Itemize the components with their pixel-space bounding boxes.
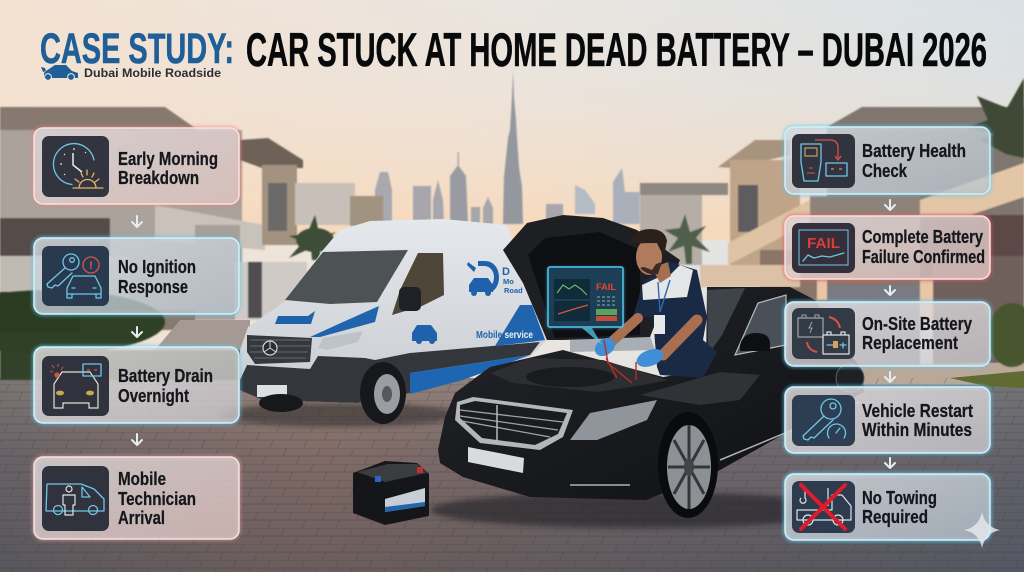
van hood stripe <box>310 306 379 337</box>
icon: battery swap <box>792 308 855 359</box>
van grille <box>247 335 312 364</box>
van front wheel <box>360 362 406 424</box>
panel: vehicle restart within minutes <box>785 387 990 453</box>
left villas <box>0 107 383 330</box>
label: Arrival <box>118 508 165 528</box>
brand logo: Dubai Mobile Roadside <box>41 65 221 80</box>
arrow <box>132 434 142 445</box>
technician hair <box>630 229 667 256</box>
van headlight <box>318 331 363 350</box>
label: Vehicle Restart <box>862 401 973 421</box>
car plate <box>468 447 524 473</box>
icon: van and technician <box>42 466 109 531</box>
arrow <box>885 200 895 210</box>
panel: mobile technician arrival <box>34 457 239 539</box>
technician right arm <box>663 320 697 355</box>
arrow <box>132 216 142 227</box>
car body <box>438 287 864 500</box>
van rear wheel <box>259 394 303 412</box>
van logo text <box>502 266 523 295</box>
label: Response <box>118 277 188 297</box>
van door window <box>392 253 444 315</box>
lanyard and badge <box>654 280 670 334</box>
technician shirt yoke <box>642 265 693 300</box>
car headlight <box>570 400 657 440</box>
label: Technician <box>118 489 196 509</box>
rear wheel <box>836 364 864 392</box>
icon: car with drained battery <box>42 356 109 416</box>
label: On-Site Battery <box>862 314 972 334</box>
car grille <box>455 397 573 450</box>
label: No Ignition <box>118 257 196 277</box>
technician beard <box>640 262 662 274</box>
gloves <box>591 334 666 370</box>
panel: no ignition response <box>34 238 239 314</box>
hedge right <box>988 303 1024 367</box>
panel: early morning breakdown <box>34 128 239 204</box>
van lower blue stripe <box>410 355 530 394</box>
panel: battery drain overnight <box>34 347 239 423</box>
label: Check <box>862 161 908 181</box>
car battery on pavement <box>353 461 429 525</box>
technician head <box>636 239 662 275</box>
label: Early Morning <box>118 149 218 169</box>
icon: tester and battery <box>792 134 855 188</box>
car front wheel <box>658 412 718 518</box>
technician <box>591 229 717 383</box>
icon: key, alert and car <box>42 246 109 306</box>
label: Replacement <box>862 333 958 353</box>
van logo text: Mo <box>503 277 514 286</box>
van mobile service text: Mobile service <box>476 329 533 341</box>
test leads <box>604 340 636 383</box>
label: Complete Battery <box>862 227 983 247</box>
icon: sparkle watermark <box>964 512 1000 548</box>
van windshield <box>285 250 408 304</box>
van logo text: D <box>502 266 510 278</box>
car mirror <box>740 333 770 351</box>
technician neck <box>652 262 671 283</box>
technician torso <box>633 262 717 378</box>
label: No Towing <box>862 488 937 508</box>
arrow <box>885 458 895 468</box>
holographic diagnostic panel <box>547 267 624 345</box>
panel: battery health check <box>785 127 990 194</box>
paved driveway <box>0 320 1024 572</box>
hedge and lawn left <box>0 290 240 380</box>
arrow <box>132 327 142 337</box>
car windows <box>707 288 745 355</box>
sky background <box>0 0 1024 380</box>
black sedan <box>438 215 864 518</box>
van hood logo <box>275 311 315 324</box>
engine bay <box>490 358 668 392</box>
icon: fail monitor: FAIL <box>807 236 840 252</box>
label: Mobile <box>118 469 166 489</box>
van logo <box>467 261 499 296</box>
van small car icon <box>412 325 437 344</box>
van lower body <box>240 342 540 403</box>
icon: fail monitor <box>792 223 855 273</box>
label: Within Minutes <box>862 420 972 440</box>
panel: complete battery failure confirmed <box>785 216 990 279</box>
palm tree left <box>289 215 340 260</box>
label: Overnight <box>118 386 189 406</box>
label: Breakdown <box>118 168 199 188</box>
icon: key and gauge <box>792 395 855 446</box>
icon: clock and sunrise <box>42 136 109 197</box>
logo car icon <box>41 65 78 80</box>
title: CASE STUDY: <box>40 25 234 73</box>
open hood <box>503 215 680 340</box>
van mirror <box>399 287 421 311</box>
brand logo: Dubai Mobile Roadside: Dubai Mobile Roadside <box>84 66 221 80</box>
FAIL readout: FAIL <box>596 282 617 292</box>
arrow <box>885 372 895 382</box>
car trim <box>570 402 860 485</box>
panel: on-site battery replacement <box>785 302 990 366</box>
panel: no towing required <box>785 474 990 540</box>
service van <box>240 219 547 424</box>
icon: key, alert and car: ! <box>89 260 93 272</box>
technician left arm <box>607 318 638 346</box>
label: Battery Health <box>862 141 966 161</box>
label: Battery Drain <box>118 366 213 386</box>
van blue side panel <box>495 305 545 346</box>
icon: tow truck crossed out <box>792 481 855 533</box>
arrow <box>885 286 895 295</box>
car fender highlight <box>640 372 760 405</box>
palm tree right <box>966 78 1024 158</box>
Dubai skyline with Burj Khalifa <box>375 70 640 224</box>
label: Required <box>862 507 928 527</box>
windscreen reflection <box>570 336 655 352</box>
van plate <box>257 385 287 397</box>
van logo text: Road <box>504 286 523 295</box>
right villas <box>640 107 1024 371</box>
label: Failure Confirmed <box>862 247 985 267</box>
